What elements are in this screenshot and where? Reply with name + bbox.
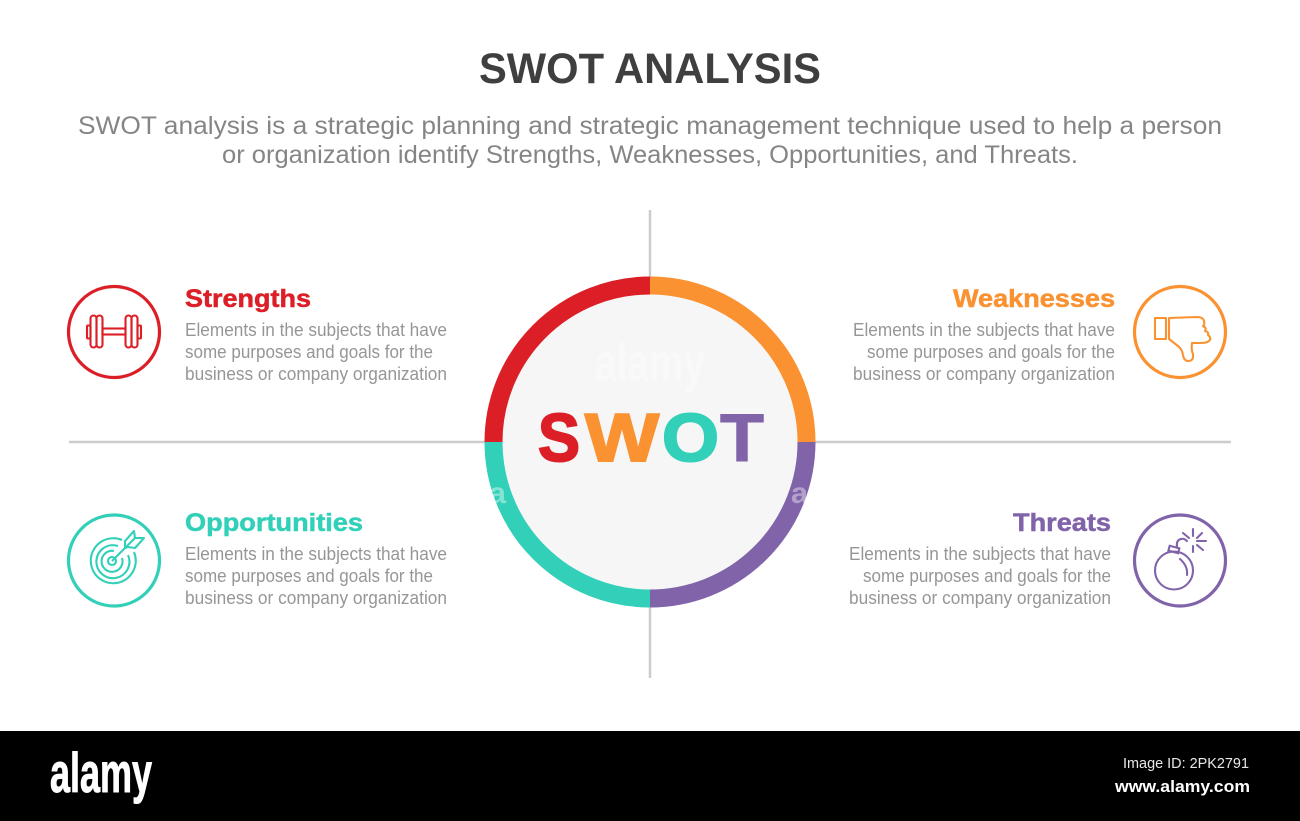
cross axis lines <box>69 210 1231 678</box>
image id: Image ID: 2PK2791 <box>1123 755 1249 772</box>
icon: dumbbell <box>68 286 160 378</box>
panel: strengths <box>68 285 447 384</box>
text block: opportunities <box>185 544 447 608</box>
panel: threats <box>849 509 1226 608</box>
text block: threats: business or company organization <box>849 588 1111 608</box>
footer bar <box>0 731 1300 821</box>
website: www.alamy.com <box>1114 777 1250 796</box>
text block: strengths: Elements in the subjects that have <box>185 320 447 340</box>
text block: strengths: some purposes and goals for the <box>185 342 433 362</box>
text block: strengths: business or company organization <box>185 364 447 384</box>
SWOT letter S: S <box>538 400 580 476</box>
title: SWOT ANALYSIS <box>479 45 821 93</box>
ring segment: weaknesses <box>650 286 806 442</box>
icon: thumbs down <box>1134 286 1226 378</box>
text block: opportunities: business or company organization <box>185 588 447 608</box>
watermark: alamy <box>595 333 705 393</box>
text block: weaknesses <box>853 320 1115 384</box>
watermark letter left: a <box>489 477 506 510</box>
SWOT letter T: T <box>720 400 764 476</box>
text block: threats: some purposes and goals for the <box>863 566 1111 586</box>
central SWOT circle <box>489 286 808 598</box>
heading: weaknesses: Weaknesses <box>953 285 1115 313</box>
text block: threats: Elements in the subjects that have <box>849 544 1111 564</box>
text block: strengths <box>185 320 447 384</box>
icon: target with arrow <box>68 515 160 606</box>
SWOT letter O: O <box>662 400 719 476</box>
text block: weaknesses: some purposes and goals for the <box>867 342 1115 362</box>
panel: weaknesses <box>853 285 1226 384</box>
footer logo: alamy <box>50 741 152 804</box>
heading: threats: Threats <box>1013 509 1111 537</box>
icon: bomb <box>1134 515 1226 606</box>
watermark letter right: a <box>791 477 808 510</box>
text block: threats <box>849 544 1111 608</box>
heading: strengths: Strengths <box>185 285 311 313</box>
ring segment: opportunities <box>494 442 650 598</box>
circle background <box>500 292 800 592</box>
heading: opportunities: Opportunities <box>185 509 363 537</box>
subtitle: SWOT analysis is a strategic planning and strategic management technique used to help a person <box>78 112 1222 140</box>
subtitle <box>78 112 1222 169</box>
text block: opportunities: Elements in the subjects that have <box>185 544 447 564</box>
subtitle: or organization identify Strengths, Weaknesses, Opportunities, and Threats. <box>222 141 1078 169</box>
ring segment: strengths <box>494 286 650 442</box>
SWOT letter W: W <box>585 400 660 476</box>
ring segment: threats <box>650 442 806 598</box>
panel: opportunities <box>68 509 447 608</box>
text block: weaknesses: business or company organization <box>853 364 1115 384</box>
text block: opportunities: some purposes and goals for the <box>185 566 433 586</box>
text block: weaknesses: Elements in the subjects that have <box>853 320 1115 340</box>
